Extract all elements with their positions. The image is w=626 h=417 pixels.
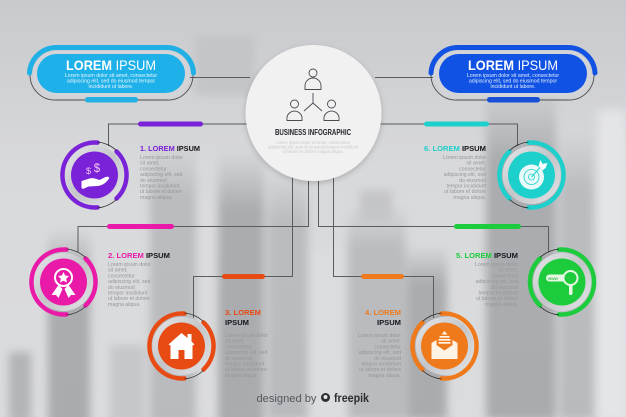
icon: hand with dollars: $: [94, 163, 101, 175]
footer credit: [256, 391, 369, 405]
node 1 text: Lorem ipsum dolor: [140, 155, 183, 161]
node 5 text: magna aliqua.: [485, 302, 518, 308]
node 6 text: magna aliqua.: [453, 195, 486, 201]
node 3 text: magna aliqua.: [225, 373, 258, 379]
right header pill: LOREM IPSUM: [468, 57, 558, 73]
node 6 text: Lorem ipsum dolor: [443, 155, 486, 161]
node 6 text: sit amet,: [466, 161, 486, 167]
node 5 text: ut labore et dolore: [476, 296, 518, 302]
node 4 text: Lorem ipsum dolor: [358, 333, 401, 339]
node 1 text: 1. LOREM IPSUM: [140, 144, 200, 153]
node 4 text: do eiusmod: [374, 356, 401, 362]
left header pill: [30, 47, 194, 102]
node 6 text: do eiusmod: [459, 178, 486, 184]
central description: Lorem ipsum dolor sit amet, consectetur: [276, 140, 351, 145]
left header pill: adipiscing elit, sed do eiusmod tempor: [67, 78, 155, 84]
icon: award ribbon: [52, 269, 76, 298]
icon: hand with dollars: [82, 163, 109, 189]
node 1 text: do eiusmod: [140, 178, 167, 184]
node 5 text: sit amet,: [498, 268, 518, 274]
node 3: red: [149, 313, 214, 379]
central circle: [246, 45, 382, 181]
node 1 text: ut labore et dolore: [140, 189, 182, 195]
footer credit: freepik: [334, 391, 369, 405]
node 3 text: do eiusmod: [225, 356, 252, 362]
icon: house: [168, 333, 194, 359]
node 3 text: ut labore et dolore: [225, 367, 267, 373]
right header pill: Lorem ipsum dolor sit amet, consectetur: [467, 73, 559, 79]
central title: BUSINESS INFOGRAPHIC: [275, 128, 351, 137]
node 1 text: sit amet,: [140, 161, 160, 167]
icon: target with arrow: [519, 160, 548, 190]
accent bars on connectors: [107, 122, 521, 279]
node 2 text: sit amet,: [108, 268, 128, 274]
node 4 text: 4. LOREM: [365, 308, 401, 317]
node 3 text: IPSUM: [225, 318, 249, 327]
node 6 text: 6. LOREM IPSUM: [424, 144, 486, 153]
central description: ut labore et dolore magna aliqua.: [282, 149, 344, 154]
left header pill: LOREM IPSUM: [66, 57, 156, 73]
node 4 text: [358, 308, 402, 379]
node 2 text: adipiscing elit, sed: [108, 279, 151, 285]
connector lines: [78, 78, 548, 318]
icon: open envelope: [432, 331, 458, 359]
node 4 text: sit amet,: [381, 339, 401, 345]
node 5 text: 5. LOREM IPSUM: [456, 251, 518, 260]
node 1 text: consectetur: [140, 166, 167, 172]
right header pill: incididunt ut labore.: [490, 84, 536, 90]
node 5 text: adipiscing elit, sed: [476, 279, 518, 285]
node 4 text: magna aliqua.: [368, 373, 401, 379]
node 5 text: [456, 251, 519, 308]
node 4 text: ut labore et dolore: [359, 367, 401, 373]
node 2 text: ut labore et dolore: [108, 296, 150, 302]
central description: adipiscing elit, sed do eiusmod tempor incididunt: [268, 144, 359, 150]
node 5: green: [530, 249, 594, 315]
node 4 text: tempor incididunt: [361, 362, 402, 368]
node 6 text: [424, 144, 487, 201]
node 4 text: IPSUM: [377, 318, 401, 327]
node 1 text: [140, 144, 200, 201]
node 1 text: tempor incididunt: [140, 184, 180, 190]
icon: people network: [287, 69, 339, 120]
node 1 text: magna aliqua.: [140, 195, 173, 201]
node 3 text: [225, 308, 268, 379]
node 3 text: tempor incididunt: [225, 362, 265, 368]
node 6: teal: [499, 142, 564, 208]
node 2 text: [108, 251, 170, 308]
node 2 text: Lorem ipsum dolor: [108, 262, 151, 268]
node 3 text: adipiscing elit, sed: [225, 350, 268, 356]
node 2 text: do eiusmod: [108, 285, 135, 291]
node 2: magenta: [31, 249, 96, 315]
node 2 text: 2. LOREM IPSUM: [108, 251, 170, 260]
node 6 text: tempor incididunt: [446, 184, 487, 190]
node 6 text: adipiscing elit, sed: [444, 172, 486, 178]
node 3 text: sit amet,: [225, 339, 245, 345]
left header pill: Lorem ipsum dolor sit amet, consectetur: [65, 73, 157, 79]
left header pill: incididunt ut labore.: [88, 84, 134, 90]
node 3 text: consectetur: [225, 344, 252, 350]
node 5 text: do eiusmod: [491, 285, 518, 291]
node 5 text: consectetur: [491, 273, 518, 279]
node 4 text: consectetur: [374, 344, 401, 350]
node 4 text: adipiscing elit, sed: [359, 350, 401, 356]
node 5 text: tempor incididunt: [478, 290, 519, 296]
node 2 text: magna aliqua.: [108, 302, 141, 308]
node 4: orange: [412, 313, 477, 379]
right header pill: adipiscing elit, sed do eiusmod tempor: [469, 78, 557, 84]
icon: hand with dollars: $: [86, 166, 91, 176]
footer credit: designed by: [256, 393, 317, 405]
node 1 text: adipiscing elit, sed: [140, 172, 183, 178]
node 6 text: ut labore et dolore: [444, 189, 486, 195]
node 3 text: 3. LOREM: [225, 308, 261, 317]
node 1: purple: [62, 142, 127, 208]
node 3 text: Lorem ipsum dolor: [225, 333, 268, 339]
node 2 text: consectetur: [108, 273, 135, 279]
central description: [268, 140, 359, 154]
icon: www search: www: [548, 276, 558, 281]
node 5 text: Lorem ipsum dolor: [475, 262, 518, 268]
node 6 text: consectetur: [459, 166, 486, 172]
node 2 text: tempor incididunt: [108, 290, 148, 296]
right header pill: [431, 47, 595, 102]
